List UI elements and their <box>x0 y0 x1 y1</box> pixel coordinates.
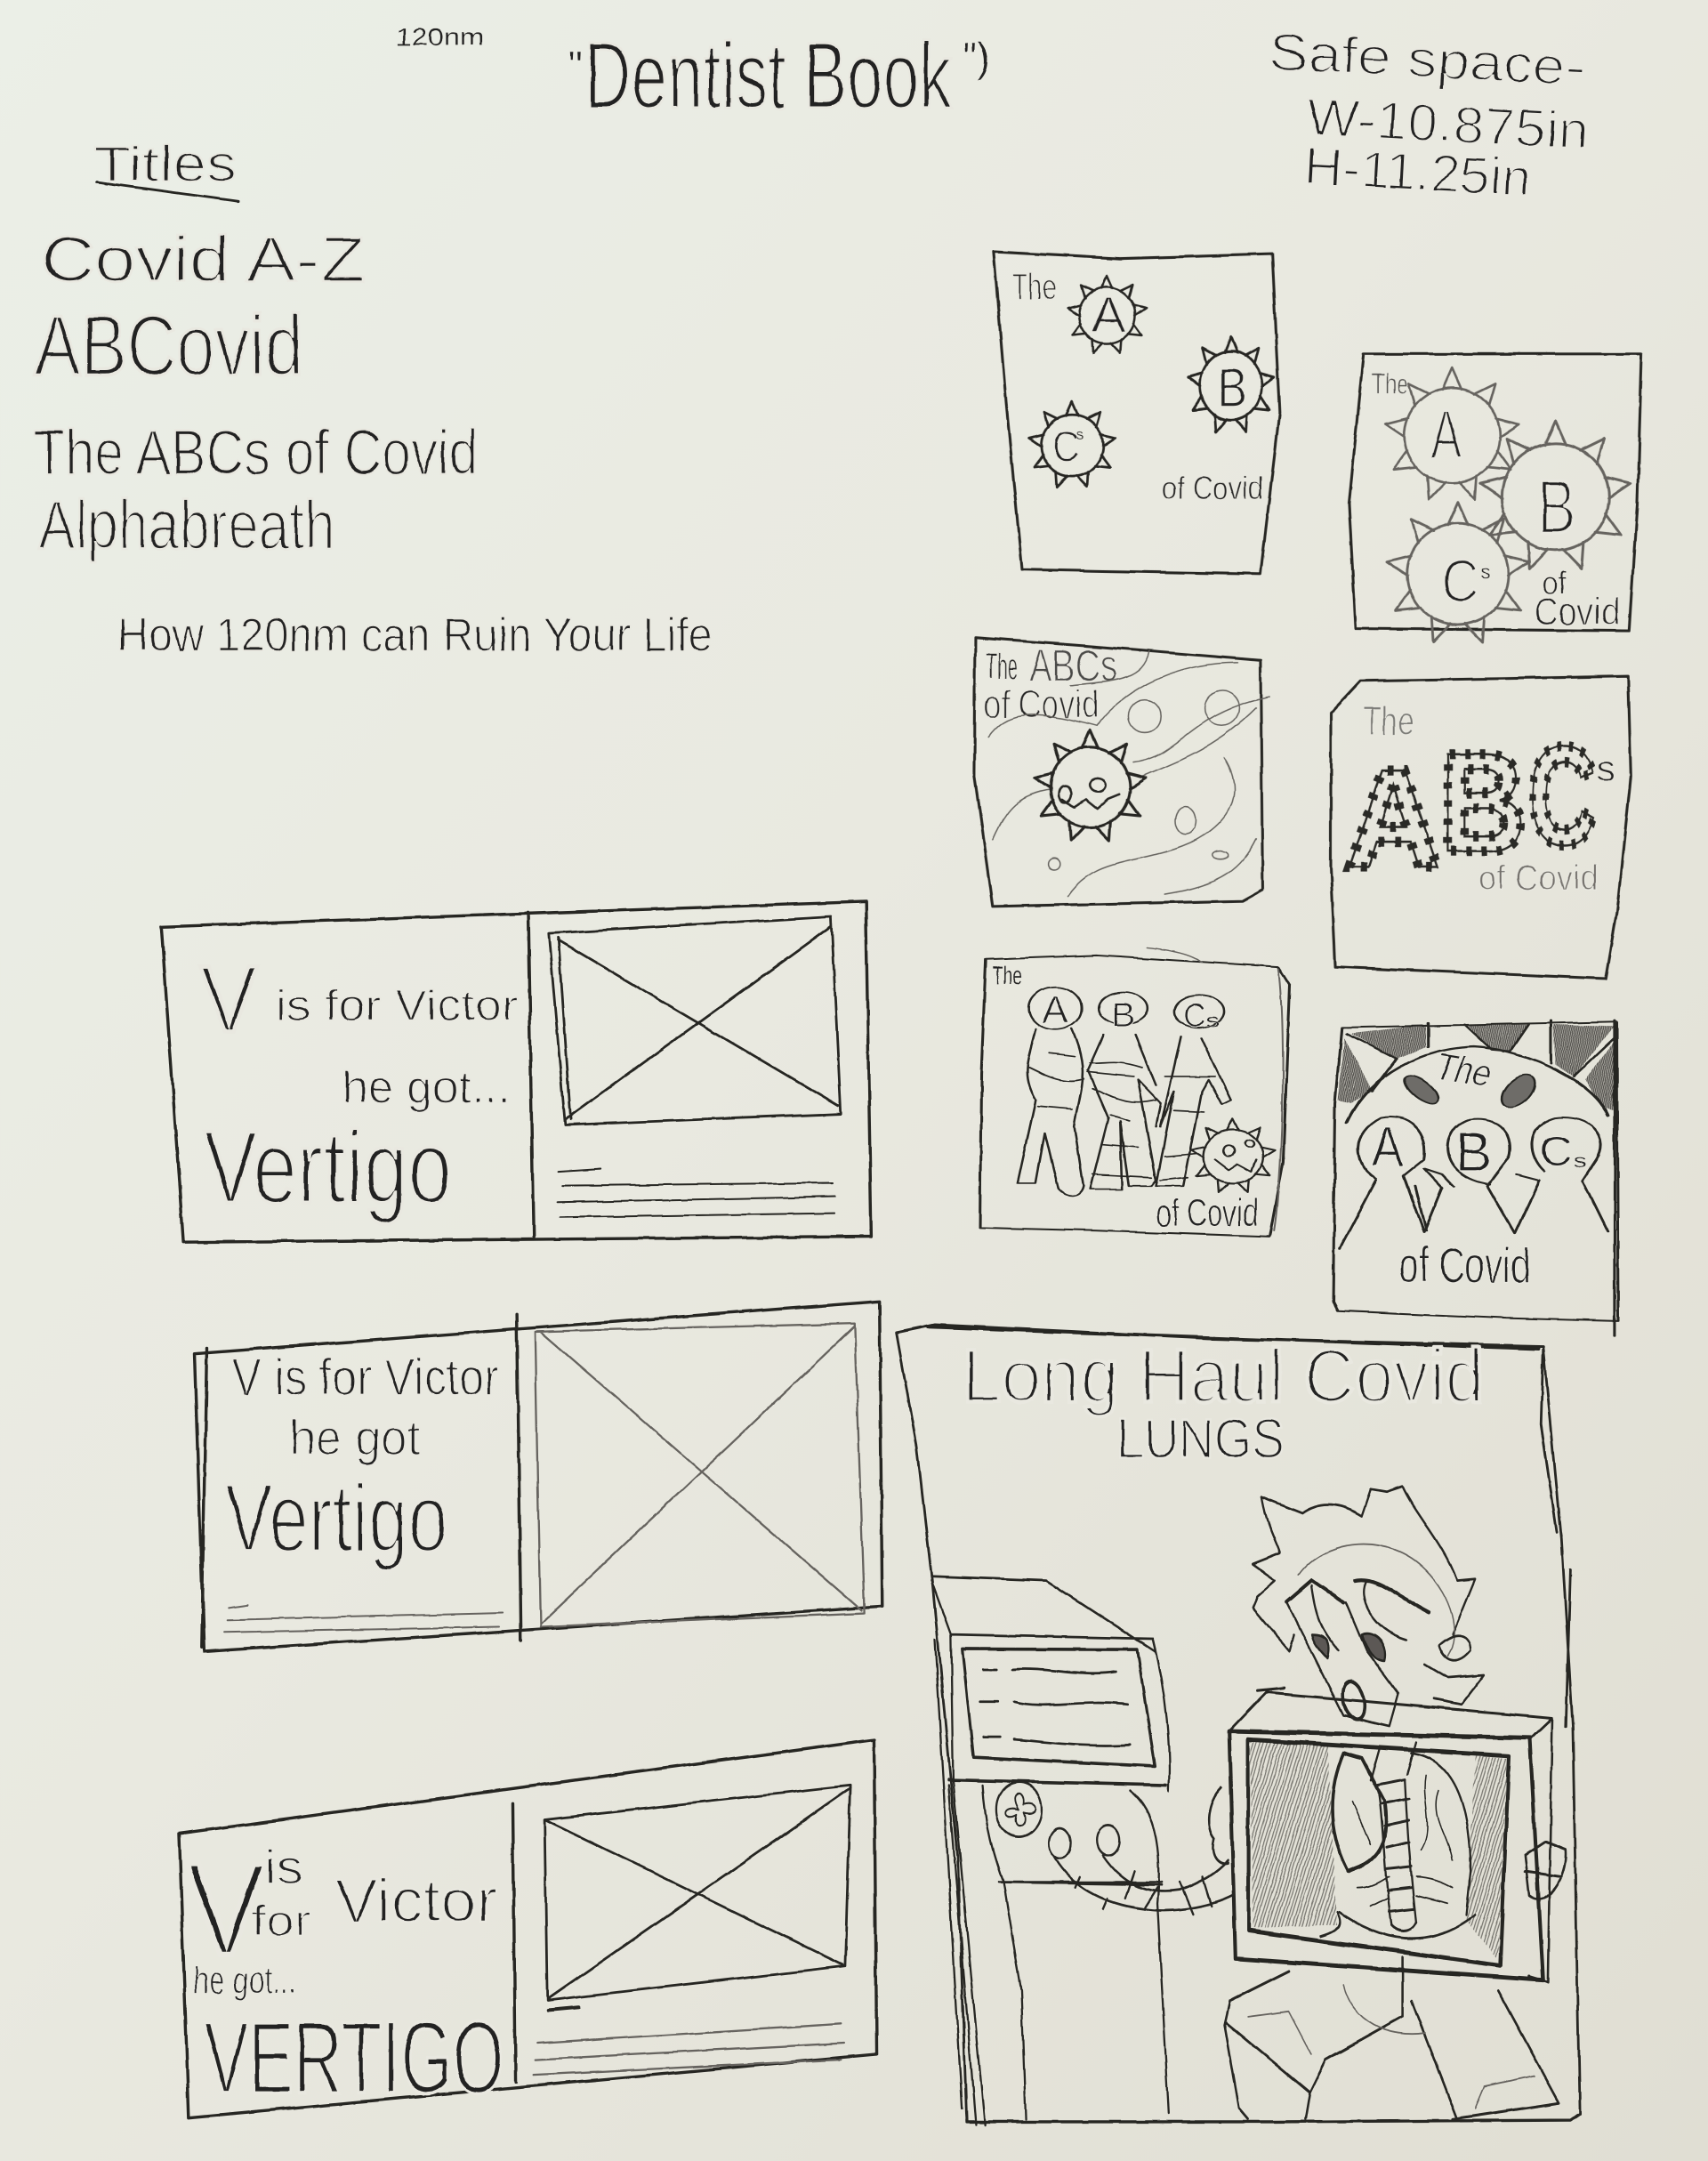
spread text: is <box>265 1842 303 1894</box>
cover thumbnail 6: of Covid <box>1399 1238 1531 1294</box>
cover thumbnail 6: A <box>1372 1116 1404 1179</box>
image placeholder <box>535 1324 865 1627</box>
spread text: Vertigo <box>204 1110 452 1224</box>
caption lines <box>225 1605 504 1633</box>
spread frame <box>195 1302 882 1651</box>
character head with mask <box>1253 1487 1484 1726</box>
cover thumbnail 1: of Covid <box>1162 471 1263 506</box>
cover thumbnail 2: B <box>1537 464 1576 550</box>
cover thumbnails top <box>974 252 1642 979</box>
spread text: Vertigo <box>225 1464 448 1571</box>
cover thumbnail 6: s <box>1574 1152 1587 1171</box>
cover thumbnail 2: s <box>1480 560 1491 583</box>
cover thumbnail 4: The <box>1363 697 1414 744</box>
safe space note <box>1261 23 1594 210</box>
spread layout 2 <box>195 1302 882 1651</box>
titles heading <box>93 136 238 201</box>
cover thumbnail 5: The <box>993 961 1022 991</box>
spread frame <box>179 1740 877 2117</box>
spread text: he got... <box>342 1062 510 1113</box>
spread text <box>200 947 519 1224</box>
cover thumbnail 3: ABCs <box>1029 640 1117 690</box>
spread text <box>225 1349 499 1571</box>
spread text: V is for Victor <box>231 1349 499 1407</box>
cover thumbnail 3: of Covid <box>984 681 1100 727</box>
spread text: he got <box>289 1410 421 1465</box>
cover thumbnail 4: C <box>1528 717 1596 875</box>
spread text: for <box>251 1896 311 1946</box>
title options <box>33 224 713 661</box>
character legs <box>1225 1957 1559 2119</box>
cover thumbnail 5 <box>980 947 1290 1237</box>
mask eyes <box>1398 1072 1542 1110</box>
cover thumbnail 2: C <box>1442 549 1478 615</box>
cover thumbnail 1: B <box>1217 357 1247 417</box>
cover thumbnail 5: C <box>1183 997 1206 1034</box>
safe space note: Safe space- <box>1268 23 1587 97</box>
titles heading: Titles <box>93 136 238 191</box>
cover thumbnail 2: of <box>1542 565 1567 601</box>
cover thumbnail 1 <box>994 252 1279 574</box>
caption lines <box>534 2024 843 2075</box>
header <box>396 23 1594 210</box>
page title: Dentist Book <box>584 24 951 128</box>
title options: Alphabreath <box>38 488 335 564</box>
page title: " <box>568 43 583 89</box>
cover thumbnail 6 <box>1333 1020 1618 1336</box>
cover thumbnail 4: B <box>1439 724 1526 882</box>
spread text: he got... <box>193 1960 296 2003</box>
title options: How 120nm can Ruin Your Life <box>117 609 713 661</box>
panel: long haul covid lungs <box>897 1325 1580 2125</box>
cover thumbnail 1: s <box>1076 425 1084 443</box>
panel frame <box>897 1325 1580 2122</box>
spread frame <box>161 901 871 1242</box>
cover thumbnail 5: B <box>1110 995 1136 1034</box>
cover thumbnail 4: A <box>1346 739 1441 897</box>
ventilator hoses <box>1053 1855 1232 1915</box>
ventilator machine <box>931 1576 1169 2125</box>
cover thumbnail 4: C <box>1528 717 1596 875</box>
cover thumbnail 2 <box>1349 354 1642 645</box>
cover thumbnail 5: s <box>1206 1012 1220 1031</box>
cover thumbnail 1: The <box>1011 266 1057 308</box>
cover thumbnail 2: The <box>1372 368 1408 401</box>
cover thumbnail 3 <box>974 638 1269 907</box>
spread text: is for Victor <box>276 983 519 1030</box>
hands gripping monitor <box>1209 1788 1566 1899</box>
x-ray lungs and spine <box>1321 1742 1475 1939</box>
safe space note: W-10.875in <box>1305 88 1591 161</box>
title options: The ABCs of Covid <box>33 417 479 488</box>
spread text: V <box>200 947 258 1052</box>
spread text <box>186 1834 504 2115</box>
spread text: V <box>186 1834 266 1983</box>
image placeholder <box>549 916 841 1125</box>
spread text: VERTIGO <box>204 2001 504 2115</box>
spread layout 3 <box>179 1740 877 2117</box>
cover thumbnail 4 <box>1331 676 1631 979</box>
cover thumbnail 4: B <box>1439 724 1526 882</box>
caption lines <box>559 1169 835 1217</box>
cover thumbnail 1: A <box>1092 286 1126 343</box>
cover thumbnail 5: A <box>1042 988 1069 1031</box>
titles list <box>33 136 713 661</box>
panel heading: LUNGS <box>1116 1407 1285 1471</box>
panel heading <box>963 1334 1484 1471</box>
title options: Covid A-Z <box>42 224 366 295</box>
size note: 120nm <box>396 23 484 51</box>
panel heading: Long Haul Covid <box>963 1334 1484 1418</box>
cover thumbnail 4: of Covid <box>1478 859 1599 898</box>
cover thumbnail 4: A <box>1346 739 1441 897</box>
title options: ABCovid <box>35 298 303 393</box>
safe space note: H-11.25in <box>1302 138 1533 207</box>
spread text: Victor <box>335 1867 497 1935</box>
cover thumbnail 6: B <box>1455 1121 1492 1184</box>
spread layout 1 <box>161 901 871 1242</box>
cover thumbnail 6: The <box>1429 1045 1499 1095</box>
cover thumbnail 1: C <box>1052 423 1080 471</box>
cover thumbnail 4: s <box>1596 747 1615 788</box>
page title: ") <box>963 35 991 81</box>
cover thumbnail 3: The <box>986 646 1018 687</box>
cover thumbnail 2: A <box>1430 398 1462 473</box>
cover thumbnail 2: Covid <box>1534 591 1620 633</box>
image placeholder <box>544 1786 850 2000</box>
cover thumbnails bottom <box>980 947 1618 1336</box>
cover thumbnail 6: C <box>1540 1127 1572 1173</box>
x-ray monitor <box>1209 1689 1566 1982</box>
cover thumbnail 5: of Covid <box>1156 1191 1258 1235</box>
